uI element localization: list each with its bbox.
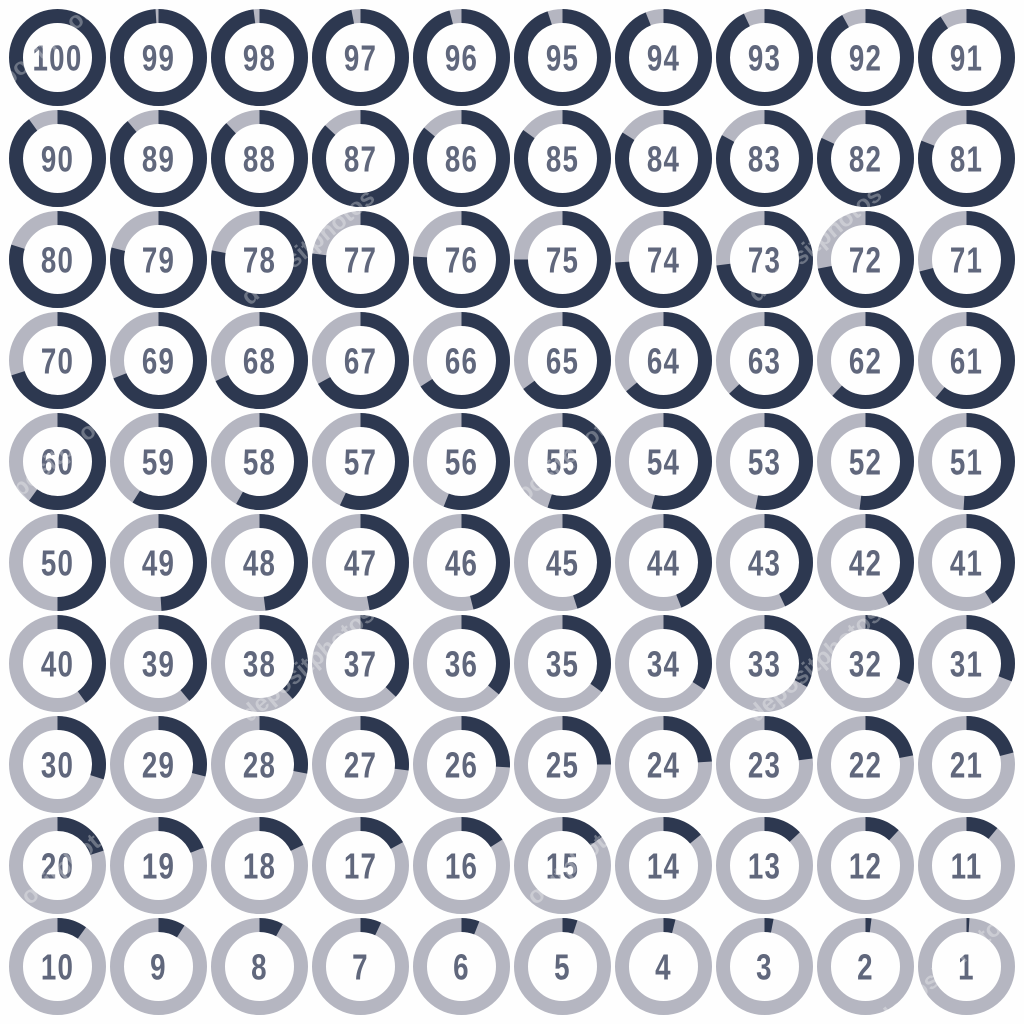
ring: 38 — [218, 622, 301, 705]
ring: 91: 91 — [950, 38, 983, 78]
ring: 71 — [925, 218, 1008, 301]
ring: 66: 66 — [445, 341, 478, 381]
ring: 10: 10 — [41, 947, 74, 987]
ring: 61: 61 — [950, 341, 983, 381]
ring: 7 — [319, 925, 402, 1008]
ring: 52 — [824, 420, 907, 503]
ring: 63: 63 — [748, 341, 781, 381]
ring: 60 — [16, 420, 99, 503]
ring: 90 — [16, 117, 99, 200]
ring: 66 — [420, 319, 503, 402]
ring: 100: 100 — [33, 38, 82, 78]
ring: 63 — [723, 319, 806, 402]
ring: 45: 45 — [546, 543, 579, 583]
ring: 12: 12 — [849, 846, 882, 886]
ring: 69 — [117, 319, 200, 402]
ring: 1 — [925, 925, 1008, 1008]
ring: 47 — [319, 521, 402, 604]
ring: 25: 25 — [546, 745, 579, 785]
ring: 48: 48 — [243, 543, 276, 583]
ring: 44 — [622, 521, 705, 604]
ring: 35 — [521, 622, 604, 705]
ring: 7: 7 — [352, 947, 369, 987]
ring: 14: 14 — [647, 846, 680, 886]
ring: 42: 42 — [849, 543, 882, 583]
ring: 13: 13 — [748, 846, 781, 886]
ring: 32: 32 — [849, 644, 882, 684]
ring: 70: 70 — [41, 341, 74, 381]
ring: 9 — [117, 925, 200, 1008]
ring: 49 — [117, 521, 200, 604]
ring: 85: 85 — [546, 139, 579, 179]
ring: 52: 52 — [849, 442, 882, 482]
watermark: depositphotos — [489, 399, 633, 526]
ring: 37: 37 — [344, 644, 377, 684]
ring: 72 — [824, 218, 907, 301]
ring: 96 — [420, 16, 503, 99]
ring: 36: 36 — [445, 644, 478, 684]
ring: 86: 86 — [445, 139, 478, 179]
ring: 99: 99 — [142, 38, 175, 78]
ring: 97: 97 — [344, 38, 377, 78]
ring: 29 — [117, 723, 200, 806]
ring: 47: 47 — [344, 543, 377, 583]
ring: 85 — [521, 117, 604, 200]
ring: 81: 81 — [950, 139, 983, 179]
ring: 46 — [420, 521, 503, 604]
ring: 57 — [319, 420, 402, 503]
ring: 19: 19 — [142, 846, 175, 886]
ring: 94: 94 — [647, 38, 680, 78]
ring: 14 — [622, 824, 705, 907]
watermark: depositphotos — [743, 181, 887, 308]
ring: 37 — [319, 622, 402, 705]
ring: 53 — [723, 420, 806, 503]
ring: 51: 51 — [950, 442, 983, 482]
ring: 50: 50 — [41, 543, 74, 583]
ring: 27 — [319, 723, 402, 806]
ring: 86 — [420, 117, 503, 200]
ring: 2 — [824, 925, 907, 1008]
ring: 62: 62 — [849, 341, 882, 381]
ring: 6: 6 — [453, 947, 470, 987]
ring: 8 — [218, 925, 301, 1008]
ring: 10 — [16, 925, 99, 1008]
ring: 43 — [723, 521, 806, 604]
ring: 54 — [622, 420, 705, 503]
ring: 18: 18 — [243, 846, 276, 886]
watermark: depositphotos — [743, 601, 887, 728]
ring: 73 — [723, 218, 806, 301]
ring: 81 — [925, 117, 1008, 200]
ring: 95: 95 — [546, 38, 579, 78]
ring: 53: 53 — [748, 442, 781, 482]
ring: 3 — [723, 925, 806, 1008]
ring: 89 — [117, 117, 200, 200]
ring: 5 — [521, 925, 604, 1008]
ring: 25 — [521, 723, 604, 806]
ring: 55: 55 — [546, 442, 579, 482]
ring: 15 — [521, 824, 604, 907]
ring: 45 — [521, 521, 604, 604]
ring: 17 — [319, 824, 402, 907]
ring: 2: 2 — [857, 947, 874, 987]
ring: 87: 87 — [344, 139, 377, 179]
ring: 67 — [319, 319, 402, 402]
ring: 27: 27 — [344, 745, 377, 785]
ring: 17: 17 — [344, 846, 377, 886]
ring: 95 — [521, 16, 604, 99]
ring: 59 — [117, 420, 200, 503]
ring: 44: 44 — [647, 543, 680, 583]
ring: 82 — [824, 117, 907, 200]
ring: 40 — [16, 622, 99, 705]
ring: 59: 59 — [142, 442, 175, 482]
ring: 43: 43 — [748, 543, 781, 583]
ring: 74: 74 — [647, 240, 680, 280]
ring: 21 — [925, 723, 1008, 806]
ring: 96: 96 — [445, 38, 478, 78]
ring: 33 — [723, 622, 806, 705]
ring: 30 — [16, 723, 99, 806]
ring: 21: 21 — [950, 745, 983, 785]
ring: 50 — [16, 521, 99, 604]
ring: 98: 98 — [243, 38, 276, 78]
ring: 30: 30 — [41, 745, 74, 785]
ring: 11 — [925, 824, 1008, 907]
ring: 56: 56 — [445, 442, 478, 482]
ring: 88: 88 — [243, 139, 276, 179]
ring: 69: 69 — [142, 341, 175, 381]
ring: 89: 89 — [142, 139, 175, 179]
ring: 48 — [218, 521, 301, 604]
ring: 31 — [925, 622, 1008, 705]
ring: 78 — [218, 218, 301, 301]
ring: 46: 46 — [445, 543, 478, 583]
ring: 64 — [622, 319, 705, 402]
ring: 64: 64 — [647, 341, 680, 381]
ring: 83 — [723, 117, 806, 200]
ring: 78: 78 — [243, 240, 276, 280]
ring: 73: 73 — [748, 240, 781, 280]
ring: 100 — [16, 16, 99, 99]
ring: 4 — [622, 925, 705, 1008]
ring: 77 — [319, 218, 402, 301]
ring: 29: 29 — [142, 745, 175, 785]
ring: 32 — [824, 622, 907, 705]
ring: 49: 49 — [142, 543, 175, 583]
ring: 1: 1 — [958, 947, 975, 987]
ring: 33: 33 — [748, 644, 781, 684]
ring: 93: 93 — [748, 38, 781, 78]
ring: 9: 9 — [150, 947, 167, 987]
ring: 35: 35 — [546, 644, 579, 684]
ring: 19 — [117, 824, 200, 907]
ring: 58: 58 — [243, 442, 276, 482]
ring: 26: 26 — [445, 745, 478, 785]
ring: 88 — [218, 117, 301, 200]
ring: 42 — [824, 521, 907, 604]
ring: 13 — [723, 824, 806, 907]
ring: 22 — [824, 723, 907, 806]
ring: 24 — [622, 723, 705, 806]
ring: 31: 31 — [950, 644, 983, 684]
ring: 67: 67 — [344, 341, 377, 381]
ring: 38: 38 — [243, 644, 276, 684]
ring: 82: 82 — [849, 139, 882, 179]
ring: 92: 92 — [849, 38, 882, 78]
ring: 26 — [420, 723, 503, 806]
ring: 16 — [420, 824, 503, 907]
ring: 11: 11 — [951, 846, 982, 886]
ring: 54: 54 — [647, 442, 680, 482]
ring: 28 — [218, 723, 301, 806]
ring: 3: 3 — [756, 947, 773, 987]
ring: 83: 83 — [748, 139, 781, 179]
ring: 5: 5 — [554, 947, 571, 987]
ring: 23 — [723, 723, 806, 806]
ring: 55 — [521, 420, 604, 503]
ring: 94 — [622, 16, 705, 99]
ring: 20: 20 — [41, 846, 74, 886]
ring: 57: 57 — [344, 442, 377, 482]
ring: 22: 22 — [849, 745, 882, 785]
watermark: depositphotos — [489, 811, 633, 938]
ring: 77: 77 — [344, 240, 377, 280]
ring: 93 — [723, 16, 806, 99]
ring: 97 — [319, 16, 402, 99]
ring: 71: 71 — [950, 240, 983, 280]
ring: 20 — [16, 824, 99, 907]
ring: 68: 68 — [243, 341, 276, 381]
ring: 84: 84 — [647, 139, 680, 179]
ring: 62 — [824, 319, 907, 402]
ring: 34 — [622, 622, 705, 705]
ring: 90: 90 — [41, 139, 74, 179]
ring: 92 — [824, 16, 907, 99]
ring: 74 — [622, 218, 705, 301]
ring: 51 — [925, 420, 1008, 503]
ring: 79 — [117, 218, 200, 301]
ring: 36 — [420, 622, 503, 705]
ring: 41: 41 — [950, 543, 983, 583]
ring: 8: 8 — [251, 947, 268, 987]
ring: 68 — [218, 319, 301, 402]
ring: 6 — [420, 925, 503, 1008]
ring: 15: 15 — [546, 846, 579, 886]
ring: 34: 34 — [647, 644, 680, 684]
ring: 39: 39 — [142, 644, 175, 684]
ring: 76: 76 — [445, 240, 478, 280]
ring: 70 — [16, 319, 99, 402]
ring: 84 — [622, 117, 705, 200]
ring: 65: 65 — [546, 341, 579, 381]
ring: 28: 28 — [243, 745, 276, 785]
ring: 18 — [218, 824, 301, 907]
ring: 80: 80 — [41, 240, 74, 280]
ring: 99 — [117, 16, 200, 99]
ring: 75 — [521, 218, 604, 301]
ring: 75: 75 — [546, 240, 579, 280]
ring: 87 — [319, 117, 402, 200]
ring: 12 — [824, 824, 907, 907]
ring: 60: 60 — [41, 442, 74, 482]
ring: 61 — [925, 319, 1008, 402]
ring: 65 — [521, 319, 604, 402]
ring: 39 — [117, 622, 200, 705]
ring: 79: 79 — [142, 240, 175, 280]
watermark: depositphotos — [236, 601, 380, 728]
ring: 56 — [420, 420, 503, 503]
ring: 58 — [218, 420, 301, 503]
ring: 91 — [925, 16, 1008, 99]
ring: 98 — [218, 16, 301, 99]
ring: 40: 40 — [41, 644, 74, 684]
ring: 16: 16 — [445, 846, 478, 886]
ring: 80 — [16, 218, 99, 301]
ring: 41 — [925, 521, 1008, 604]
watermark: depositphotos — [236, 184, 380, 311]
ring: 76 — [420, 218, 503, 301]
ring: 4: 4 — [655, 947, 672, 987]
ring: 24: 24 — [647, 745, 680, 785]
ring: 72: 72 — [849, 240, 882, 280]
ring: 23: 23 — [748, 745, 781, 785]
